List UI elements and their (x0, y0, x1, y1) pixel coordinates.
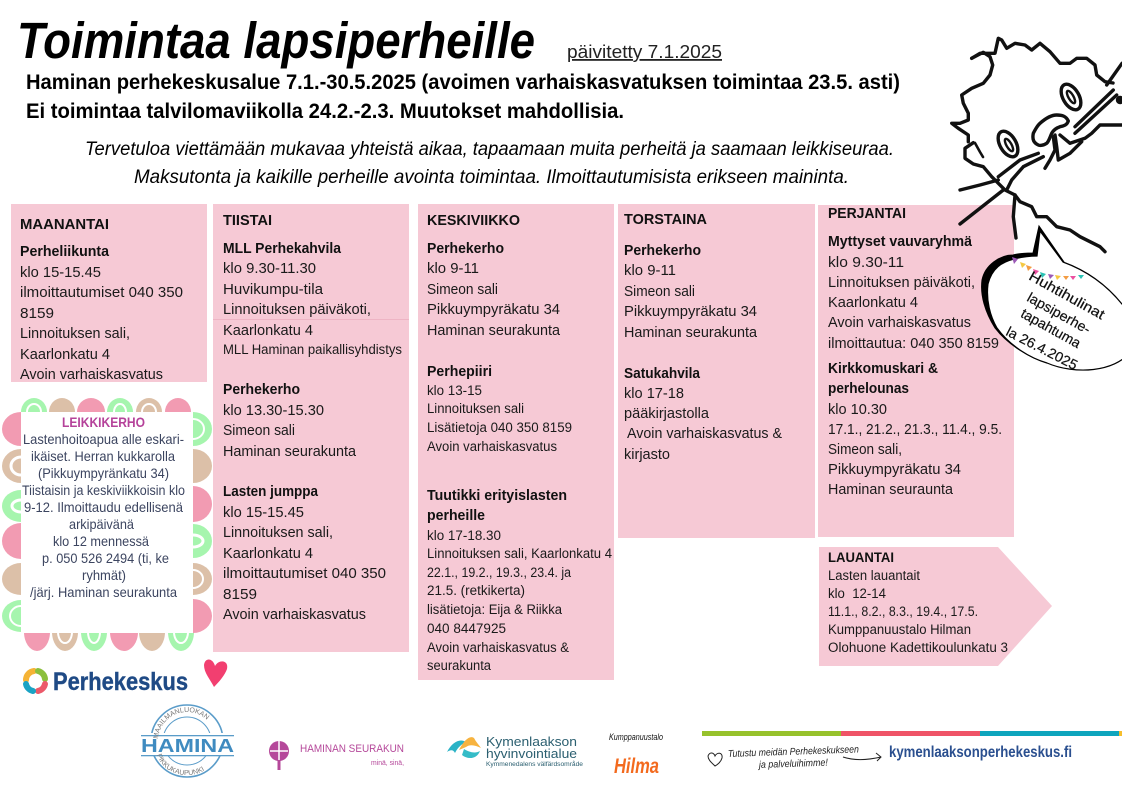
panel: leikkikerho (2, 398, 212, 651)
activity: tuutikki: klo 17-18.30 (427, 528, 501, 543)
activity: myttyset: Kaarlonkatu 4 (828, 294, 918, 311)
heading: tiistai: TIISTAI (223, 212, 272, 229)
decorative shape border (2, 398, 212, 651)
leikkikerho text: ikäiset. Herran kukkarolla (31, 448, 175, 464)
leikkikerho text: p. 050 526 2494 (ti, ke (42, 550, 169, 566)
activity: kirkkomuskari: perhelounas (828, 380, 909, 397)
title: Toimintaa lapsiperheille (17, 12, 535, 69)
logo: hamina: HAMINA (141, 736, 234, 756)
panel: maanantai (11, 204, 207, 383)
leikkikerho text: Lastenhoitoapua alle eskari- (23, 431, 184, 447)
heading: lauantai: LAUANTAI (828, 549, 894, 565)
activity: perhekerho: klo 9-11 (624, 262, 676, 279)
panel: tiistai (213, 204, 409, 652)
invitation text: Tutustu meidän Perhekeskukseen (728, 744, 859, 760)
activity: lasten jumppa: 8159 (223, 586, 257, 603)
logo: hilma: Kumppanuustalo (609, 732, 663, 742)
activity: lasten jumppa: klo 15-15.45 (223, 504, 304, 521)
activity: lasten jumppa: Lasten jumppa (223, 483, 319, 500)
panel: perjantai (818, 205, 1014, 537)
colour bar (702, 731, 1122, 736)
activity: lasten jumppa (223, 483, 386, 623)
activity: tuutikki: Tuutikki erityislasten (427, 487, 567, 504)
activity: tuutikki (427, 487, 612, 673)
activity: tuutikki: lisätietoja: Eija & Riikka (427, 602, 562, 617)
activity: tuutikki: Linnoituksen sali, Kaarlonkatu 4 (427, 546, 612, 561)
activity: lasten lauantait: Lasten lauantait (828, 568, 920, 583)
bubble text: Huhtihulinat (1026, 268, 1108, 322)
heading: keskiviikko: KESKIVIIKKO (427, 212, 520, 229)
activity: perhekerho: Haminan seurakunta (427, 322, 561, 339)
activity: perhepiiri (427, 363, 572, 454)
activity: lasten lauantait: Olohuone Kadettikoulunkatu 3 (828, 640, 1008, 655)
bubble text: tapahtuma (1018, 305, 1084, 351)
icon: nose (1033, 115, 1068, 145)
activity: myttyset: Linnoituksen päiväkoti, (828, 274, 975, 291)
leikkikerho heading: LEIKKIKERHO (62, 414, 145, 430)
activity: perhekerho: klo 9-11 (427, 260, 479, 277)
activity: perhepiiri: klo 13-15 (427, 383, 482, 398)
bubble text: lapsiperhe- (1025, 289, 1094, 337)
logo: haminan seurakunta: minä, sinä, (371, 758, 404, 767)
logo: kymenlaakson hyvinvointialue: hyvinvointialue (486, 746, 577, 761)
welcome text (85, 139, 894, 188)
activity: tuutikki: seurakunta (427, 658, 491, 673)
activity: perheliikunta: Kaarlonkatu 4 (20, 346, 110, 363)
activity: lasten lauantait: klo 12-14 (828, 586, 886, 601)
activity: perhepiiri: Linnoituksen sali (427, 401, 524, 416)
arrow (843, 753, 881, 761)
leikkikerho text: ryhmät) (82, 567, 126, 583)
activity: tuutikki: perheille (427, 507, 485, 524)
heading: perjantai: PERJANTAI (828, 205, 906, 222)
activity: perhekerho: Simeon sali (427, 281, 498, 298)
activity: lasten lauantait (828, 568, 1008, 655)
activity: perhekerho (427, 240, 561, 339)
activity: perhekerho (223, 381, 357, 460)
logo: hamina (141, 704, 234, 778)
panel: lauantai arrow (819, 547, 1052, 666)
activity: lasten jumppa: Avoin varhaiskasvatus (223, 606, 366, 623)
activity: satukahvila: kirjasto (624, 446, 670, 463)
leikkikerho text (22, 431, 185, 600)
activity: perhekerho: Perhekerho (223, 381, 300, 398)
activity: perhekerho: Pikkuympyräkatu 34 (427, 301, 560, 318)
activity: lasten jumppa: ilmoittautumiset 040 350 (223, 565, 386, 582)
activity: mll perhekahvila: Kaarlonkatu 4 (223, 322, 313, 339)
logo: hilma (609, 732, 663, 778)
logo: perhekeskus: Perhekeskus (53, 668, 188, 696)
subtitle block: Ei toimintaa talvilomaviikolla 24.2.-2.3. Muutokset mahdollisia. (26, 100, 624, 123)
activity: tuutikki: 22.1., 19.2., 19.3., 23.4. ja (427, 565, 571, 580)
activity: mll perhekahvila: Huvikumpu-tila (223, 281, 324, 298)
activity: lasten jumppa: Linnoituksen sali, (223, 524, 333, 541)
activity: perheliikunta: ilmoittautumiset 040 350 (20, 284, 183, 301)
activity: perheliikunta: Linnoituksen sali, (20, 325, 130, 342)
welcome text: Maksutonta ja kaikille perheille avointa toimintaa. Ilmoittautumisista erikseen maininta. (134, 167, 849, 188)
activity: satukahvila: klo 17-18 (624, 385, 684, 402)
activity: mll perhekahvila (223, 240, 402, 357)
leikkikerho text: klo 12 mennessä (53, 533, 149, 549)
activity: perheliikunta: Perheliikunta (20, 243, 110, 260)
activity: mll perhekahvila: Linnoituksen päiväkoti, (223, 301, 371, 318)
activity: myttyset (828, 233, 999, 352)
logo: kymenlaakson hyvinvointialue (447, 734, 583, 768)
activity: tuutikki: 040 8447925 (427, 621, 506, 636)
activity: myttyset: Myttyset vauvaryhmä (828, 233, 973, 250)
panel: keskiviikko (418, 204, 614, 680)
website url: kymenlaaksonperhekeskus.fi (889, 744, 1072, 761)
activity: perhepiiri: Perhepiiri (427, 363, 492, 380)
bubble text (1004, 268, 1108, 373)
activity: satukahvila: Avoin varhaiskasvatus & (627, 425, 782, 442)
panel: torstaina (618, 204, 815, 538)
activity: kirkkomuskari: Kirkkomuskari & (828, 360, 938, 377)
activity: myttyset: ilmoittautua: 040 350 8159 (828, 335, 999, 352)
logo: hilma: Hilma (614, 755, 659, 778)
update date: päivitetty 7.1.2025 (567, 42, 722, 62)
activity: perhekerho: Haminan seurakunta (624, 324, 758, 341)
activity: kirkkomuskari: klo 10.30 (828, 401, 887, 418)
activity: perhepiiri: Lisätietoja 040 350 8159 (427, 420, 572, 435)
activity: lasten lauantait: Kumppanuustalo Hilman (828, 622, 971, 637)
activity: kirkkomuskari: Haminan seuraunta (828, 481, 954, 498)
activity: mll perhekahvila: MLL Haminan paikallisyhdistys (223, 342, 402, 357)
activity: perhekerho: Simeon sali (223, 422, 295, 439)
illustration: child face (952, 38, 1122, 252)
activity: mll perhekahvila: MLL Perhekahvila (223, 240, 342, 257)
activity: myttyset: klo 9.30-11 (828, 254, 904, 271)
activity: perhekerho: Perhekerho (427, 240, 504, 257)
logo: kymenlaakson hyvinvointialue: Kymmenedalens välfärdsområde (486, 760, 583, 768)
activity: perheliikunta (20, 243, 183, 383)
activity: myttyset: Avoin varhaiskasvatus (828, 314, 971, 331)
activity: lasten lauantait: 11.1., 8.2., 8.3., 19.4., 17.5. (828, 604, 978, 619)
leikkikerho text: /järj. Haminan seurakunta (30, 584, 177, 600)
bunting (1012, 257, 1084, 280)
invitation text (728, 744, 859, 771)
activity: perheliikunta: Avoin varhaiskasvatus (20, 366, 163, 383)
mouth and straws (960, 63, 1122, 238)
activity: perhekerho: Haminan seurakunta (223, 443, 357, 460)
heading: torstaina: TORSTAINA (624, 211, 707, 228)
logo: kymenlaakson hyvinvointialue: Kymenlaakson (486, 734, 577, 749)
logo: hamina: PIKKUKAUPUNKI (157, 754, 204, 775)
bubble text: la 26.4.2025 (1004, 323, 1081, 373)
invitation text: ja palveluihimme! (757, 758, 828, 771)
icon: right eye (1057, 81, 1085, 113)
leikkikerho text: arkipäivänä (69, 516, 134, 532)
logo: haminan seurakunta (269, 741, 404, 770)
activity: tuutikki: 21.5. (retkikerta) (427, 583, 525, 598)
activity: perhepiiri: Avoin varhaiskasvatus (427, 439, 557, 454)
activity: perhekerho: Perhekerho (624, 242, 701, 259)
activity: kirkkomuskari: Simeon sali, (828, 441, 902, 458)
icon: outline heart (708, 753, 722, 766)
activity: perhekerho: Simeon sali (624, 283, 695, 300)
activity: kirkkomuskari: Pikkuympyräkatu 34 (828, 461, 961, 478)
activity: lasten jumppa: Kaarlonkatu 4 (223, 545, 313, 562)
icon: pink heart (204, 659, 227, 687)
activity: tuutikki: Avoin varhaiskasvatus & (427, 640, 569, 655)
activity: perheliikunta: klo 15-15.45 (20, 264, 101, 281)
activity: kirkkomuskari (828, 360, 1002, 498)
leikkikerho text: (Pikkuympyränkatu 34) (38, 465, 169, 481)
welcome text: Tervetuloa viettämään mukavaa yhteistä aikaa, tapaamaan muita perheitä ja saamaan leikkiseuraa. (85, 139, 894, 160)
activity: satukahvila (624, 365, 782, 463)
leikkikerho text: 9-12. Ilmoittaudu edellisenä (24, 499, 183, 515)
activity: perhekerho (624, 242, 758, 341)
logo: haminan seurakunta: HAMINAN SEURAKUN (300, 743, 404, 755)
activity: perhekerho: Pikkuympyräkatu 34 (624, 303, 757, 320)
activity: kirkkomuskari: 17.1., 21.2., 21.3., 11.4., 9.5. (828, 421, 1002, 438)
subtitle block (26, 71, 900, 123)
heading: maanantai: MAANANTAI (20, 216, 109, 233)
activity: perheliikunta: 8159 (20, 305, 54, 322)
callout: huhtihulinat speech bubble (982, 226, 1122, 373)
activity: perhekerho: klo 13.30-15.30 (223, 402, 324, 419)
activity: satukahvila: Satukahvila (624, 365, 701, 382)
leikkikerho text: Tiistaisin ja keskiviikkoisin klo (22, 482, 185, 498)
activity: mll perhekahvila: klo 9.30-11.30 (223, 260, 316, 277)
activity: satukahvila: pääkirjastolla (624, 405, 710, 422)
logo: hamina: MAAILMANLUOKAN (153, 707, 210, 738)
subtitle block: Haminan perhekeskusalue 7.1.-30.5.2025 (avoimen varhaiskasvatuksen toimintaa 23.5. asti) (26, 71, 900, 94)
icon: left eye (994, 128, 1022, 160)
